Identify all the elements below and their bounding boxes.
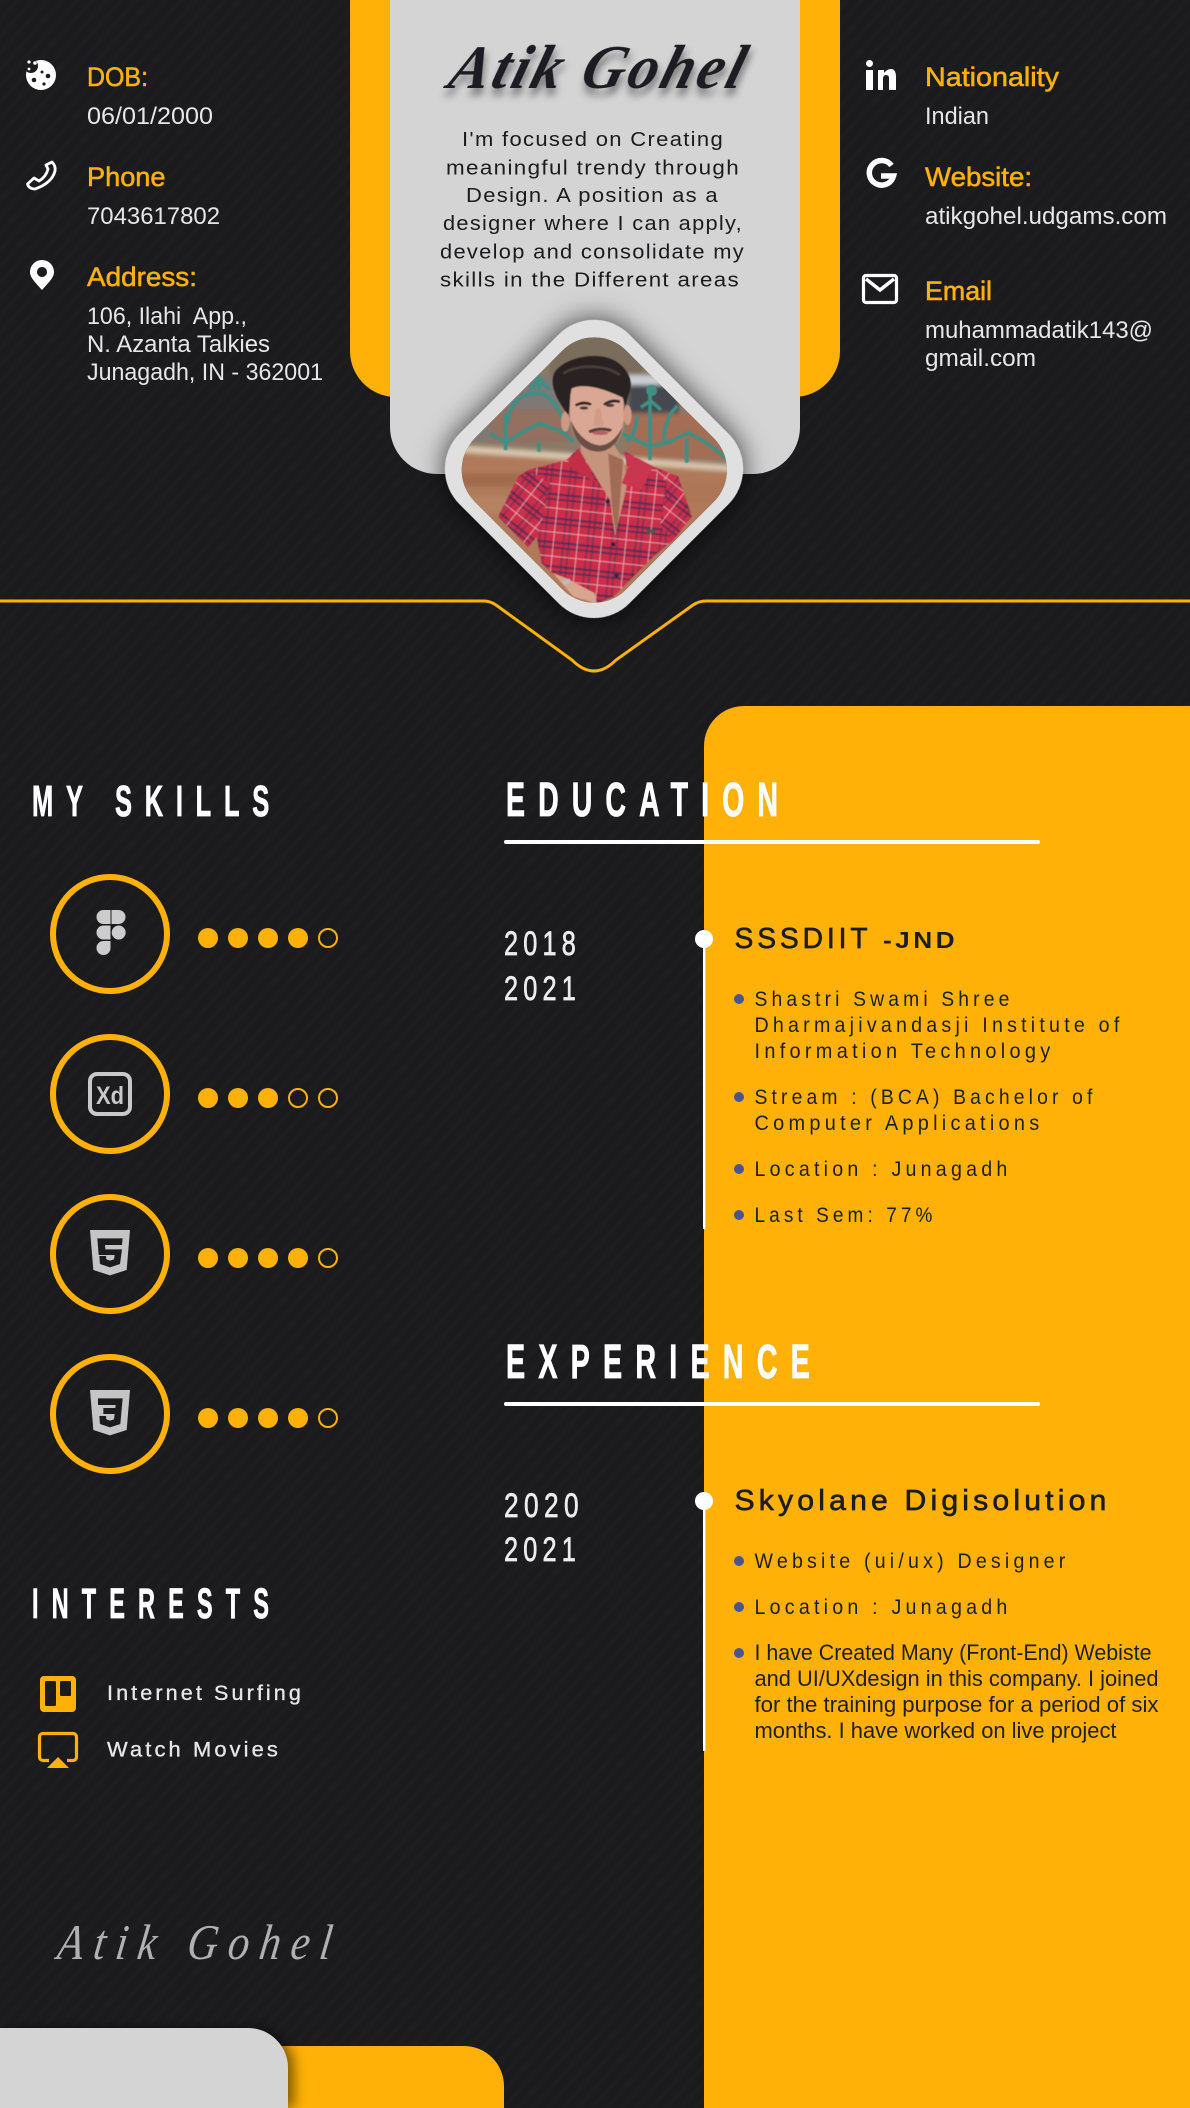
text block: intro: [440, 129, 745, 292]
rating: 4 of 5: [198, 1248, 337, 1268]
contact: nationality: Nationality: [925, 62, 1060, 92]
skill: adobe xd: [53, 1037, 337, 1151]
rating: 4 of 5: [198, 928, 337, 948]
divider arrow line: [0, 601, 1190, 671]
icon: xd: Xd: [96, 1082, 124, 1110]
arm: [553, 573, 597, 603]
contact: phone: Phone: [87, 162, 166, 192]
panel: gold right column: [704, 706, 1190, 2108]
skill: html5: [53, 1197, 337, 1311]
ears: [561, 412, 570, 432]
contact: nationality: [866, 60, 1060, 130]
contact: address: N. Azanta Talkies: [87, 331, 270, 358]
icon: css3 shield: [90, 1390, 130, 1435]
contact: email: [864, 276, 1153, 372]
bullet text: Last Sem: 77%: [754, 1204, 936, 1227]
timeline: experience: [695, 1492, 713, 1751]
shirt: [528, 448, 674, 602]
text block: intro: I'm focused on Creating: [462, 129, 724, 151]
organisation title: SSSDIIT: [734, 923, 872, 955]
photo frame: [424, 299, 764, 639]
contact: date of birth: 06/01/2000: [87, 103, 213, 130]
text block: intro: meaningful trendy through: [446, 158, 740, 180]
neck and chest: [580, 442, 627, 540]
bullet text: [754, 1550, 1158, 1743]
contact: nationality: Indian: [925, 103, 989, 130]
rating: 3 of 5: [198, 1088, 337, 1108]
icon: google: [869, 161, 894, 185]
bullet text: Information Technology: [754, 1040, 1054, 1063]
heading: experience: EXPERIENCE: [506, 1336, 823, 1389]
face: [569, 387, 624, 452]
bullet text: Shastri Swami Shree: [754, 988, 1014, 1011]
contact: address: [30, 260, 323, 386]
icon: phone: [28, 162, 55, 189]
icon: board: [40, 1676, 76, 1712]
timeline: education: [695, 930, 713, 1229]
photo: portrait illustration: [462, 337, 727, 603]
contact: email: Email: [925, 276, 992, 306]
bullet text: Location : Junagadh: [754, 1158, 1012, 1181]
contact: address: 106, Ilahi App.,: [87, 303, 247, 330]
rating: 4 of 5: [198, 1408, 337, 1428]
years: education: 2021: [504, 970, 581, 1008]
years: education: 2018: [504, 925, 581, 963]
entry: experience: [734, 1485, 1158, 1743]
contact: address: Junagadh, IN - 362001: [87, 359, 323, 386]
interest: internet surfing: Internet Surfing: [107, 1682, 304, 1705]
bullets: [734, 1556, 744, 1658]
bullets: [734, 994, 744, 1220]
bullet text: and UI/UXdesign in this company. I joined: [754, 1666, 1158, 1691]
skill: css3: [53, 1357, 337, 1471]
contact: date of birth: [24, 59, 213, 130]
bullet text: for the training purpose for a period of six: [754, 1692, 1158, 1717]
icon: screen: [40, 1734, 76, 1768]
bullet text: Dharmajivandasji Institute of: [754, 1014, 1124, 1037]
years: education: [504, 925, 581, 1008]
icon: html5 shield: [90, 1230, 130, 1275]
signature: Atik Gohel: [52, 1914, 346, 1970]
icon: xd: [90, 1074, 130, 1114]
interest: watch movies: [40, 1734, 281, 1768]
years: experience: 2020: [504, 1487, 584, 1525]
text block: intro: skills in the Different areas: [440, 270, 740, 292]
contact: phone: 7043617802: [87, 203, 220, 230]
heading: education: EDUCATION: [506, 774, 791, 827]
contact: address: Address:: [87, 262, 197, 292]
contact: date of birth: DOB:: [87, 62, 148, 92]
organisation title: -JND: [883, 927, 958, 953]
entry: education: [734, 923, 1124, 1227]
years: experience: [504, 1487, 584, 1569]
icon: linkedin: [866, 60, 896, 90]
contact: email: gmail.com: [925, 345, 1036, 372]
underline: education: [504, 840, 1040, 844]
bullet text: Location : Junagadh: [754, 1596, 1012, 1619]
icon: mail: [864, 276, 896, 302]
title: name: Atik Gohel: [438, 33, 758, 102]
corner: gold tab: [200, 2046, 504, 2108]
text block: intro: Design. A position as a: [466, 185, 719, 207]
underline: experience: [504, 1402, 1040, 1406]
icon: figma: [97, 910, 126, 955]
organisation title: Skyolane Digisolution: [734, 1485, 1110, 1517]
bullet text: months. I have worked on live project: [754, 1718, 1116, 1743]
panel: grey header card: [390, 0, 800, 474]
hair: [553, 356, 631, 415]
corner: grey tab: [0, 2028, 288, 2108]
contact: website: [869, 161, 1167, 230]
contact: website: atikgohel.udgams.com: [925, 203, 1167, 230]
heading: interests: INTERESTS: [32, 1580, 282, 1628]
bullet text: Computer Applications: [754, 1112, 1044, 1135]
panel: gold top backing: [350, 0, 840, 397]
organisation title: [734, 923, 958, 955]
heading: my skills: MY SKILLS: [32, 777, 282, 826]
contact: website: Website:: [925, 162, 1032, 192]
contact: email: muhammadatik143@: [925, 317, 1153, 344]
icon: map pin: [30, 260, 54, 290]
bullet text: [754, 988, 1124, 1227]
skill: figma: [53, 877, 337, 991]
text block: intro: develop and consolidate my: [440, 242, 745, 264]
interest: internet surfing: [40, 1676, 304, 1712]
bullet text: I have Created Many (Front-End) Webiste: [754, 1640, 1152, 1665]
icon: cookie: [24, 59, 56, 90]
interest: watch movies: Watch Movies: [107, 1738, 281, 1762]
years: experience: 2021: [504, 1531, 581, 1569]
bullet text: Website (ui/ux) Designer: [754, 1550, 1070, 1573]
contact: phone: [28, 162, 220, 230]
text block: intro: designer where I can apply,: [443, 213, 743, 235]
bullet text: Stream : (BCA) Bachelor of: [754, 1086, 1096, 1109]
